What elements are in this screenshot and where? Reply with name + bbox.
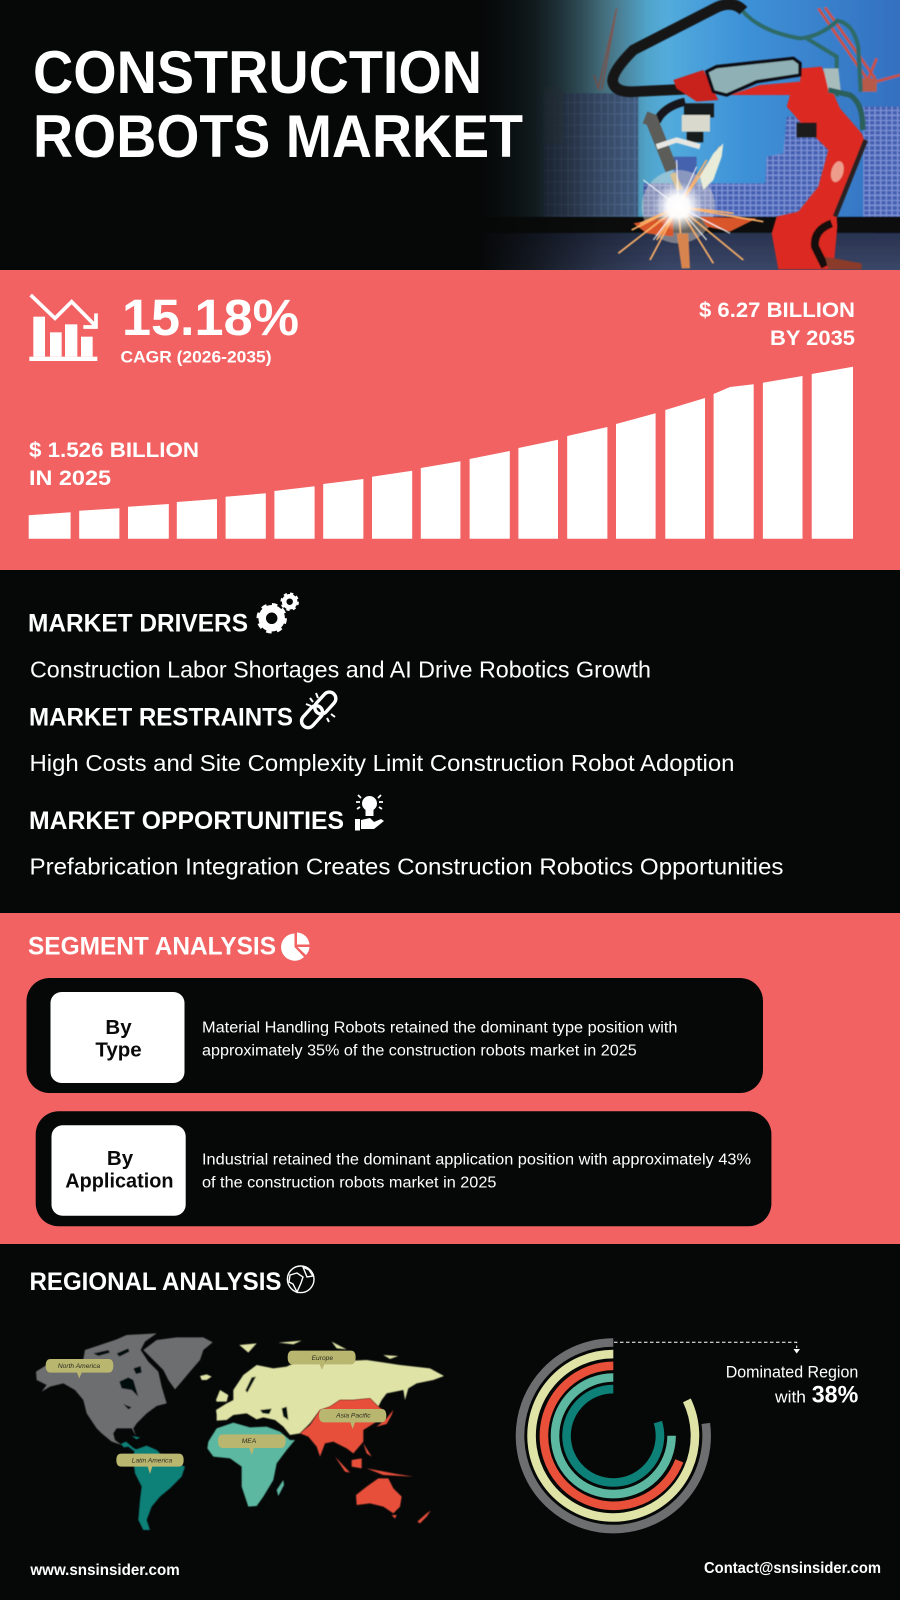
label box: by application [52, 1125, 186, 1216]
header photo: welding robot at construction site [496, 0, 900, 270]
icon: idea bulb in hand [355, 795, 384, 830]
arrow: dashed leader to dominated region [614, 1342, 800, 1354]
callout: dominated region: with [774, 1389, 806, 1407]
heading: market drivers: MARKET DRIVERS [28, 610, 248, 638]
callout: Europe: Europe [312, 1355, 333, 1362]
icon: gears [258, 594, 298, 632]
2035 value label: $ 6.27 BILLION [699, 298, 855, 322]
callout: dominated region: 38% [812, 1382, 858, 1409]
2025 value label: IN 2025 [29, 466, 111, 490]
callout: dominated region: Dominated Region [726, 1364, 858, 1382]
icon: broken chain link [299, 689, 338, 730]
callout: North America [46, 1359, 113, 1378]
footer: contact email: Contact@snsinsider.com [704, 1560, 881, 1577]
panel: segment analysis [0, 913, 900, 1244]
heading: segment analysis: SEGMENT ANALYSIS [28, 933, 276, 961]
2025 value label: $ 1.526 BILLION [29, 438, 199, 462]
text: opportunities: Prefabrication Integration Creates Construction Robotics Opportunities [30, 854, 784, 880]
CAGR label: CAGR (2026-2035) [120, 348, 272, 366]
icon: pie chart [281, 932, 310, 961]
map region: Middle East and Africa [207, 1423, 295, 1507]
panel: market dynamics [28, 594, 784, 880]
callout: MEA: MEA [242, 1438, 257, 1445]
2035 value label: BY 2035 [770, 326, 855, 350]
CAGR value: 15.18% [122, 289, 299, 346]
title: ROBOTS MARKET [33, 103, 523, 170]
callout: North America: North America [58, 1363, 100, 1370]
map region: Asia Pacific [300, 1398, 431, 1523]
callout: dominated region [726, 1364, 858, 1409]
2025 value label [29, 438, 199, 490]
text: drivers: Construction Labor Shortages and AI Drive Robotics Growth [30, 656, 651, 682]
label text: by application [65, 1147, 174, 1193]
label text: by type [95, 1016, 142, 1062]
icon: declining chart [29, 295, 97, 361]
description: by application: of the construction robots market in 2025 [202, 1174, 496, 1191]
description: by type: Material Handling Robots retained the dominant type position with [202, 1020, 678, 1037]
card: by application [36, 1111, 771, 1226]
callout: Latin America: Latin America [132, 1458, 173, 1465]
heading: regional analysis: REGIONAL ANALYSIS [30, 1268, 282, 1296]
footer: website: www.snsinsider.com [29, 1562, 180, 1579]
callout: Asia Pacific [319, 1409, 386, 1429]
map region: Europe and Asia [200, 1341, 444, 1435]
title [33, 39, 523, 170]
world map [36, 1333, 444, 1530]
label text: by application: By [107, 1147, 134, 1170]
text: restraints: High Costs and Site Complexity Limit Construction Robot Adoption [30, 750, 735, 776]
label box: by type [50, 992, 184, 1083]
description: by application [202, 1152, 751, 1191]
label text: by application: Application [65, 1170, 174, 1193]
description: by type [202, 1020, 678, 1059]
bar chart: market growth [29, 367, 853, 539]
panel: market size [0, 270, 900, 570]
map region: Latin America [121, 1436, 185, 1530]
icon: globe [287, 1266, 314, 1293]
callout: MEA [218, 1434, 286, 1455]
callout: Asia Pacific: Asia Pacific [335, 1413, 371, 1420]
label text: by type: Type [95, 1039, 142, 1062]
callout: Europe [288, 1351, 356, 1370]
title: CONSTRUCTION [33, 39, 482, 106]
description: by application: Industrial retained the dominant application position with approximately 43% [202, 1152, 751, 1169]
description: by type: approximately 35% of the construction robots market in 2025 [202, 1042, 637, 1059]
map region: North America [36, 1333, 213, 1445]
heading: market opportunities: MARKET OPPORTUNITIES [29, 807, 344, 835]
card: by type [26, 978, 763, 1093]
heading: market restraints: MARKET RESTRAINTS [29, 704, 293, 732]
radial bar chart: regional shares [520, 1342, 707, 1529]
label text: by type: By [105, 1016, 132, 1039]
2035 value label [699, 298, 855, 350]
callout: Latin America [116, 1454, 184, 1474]
